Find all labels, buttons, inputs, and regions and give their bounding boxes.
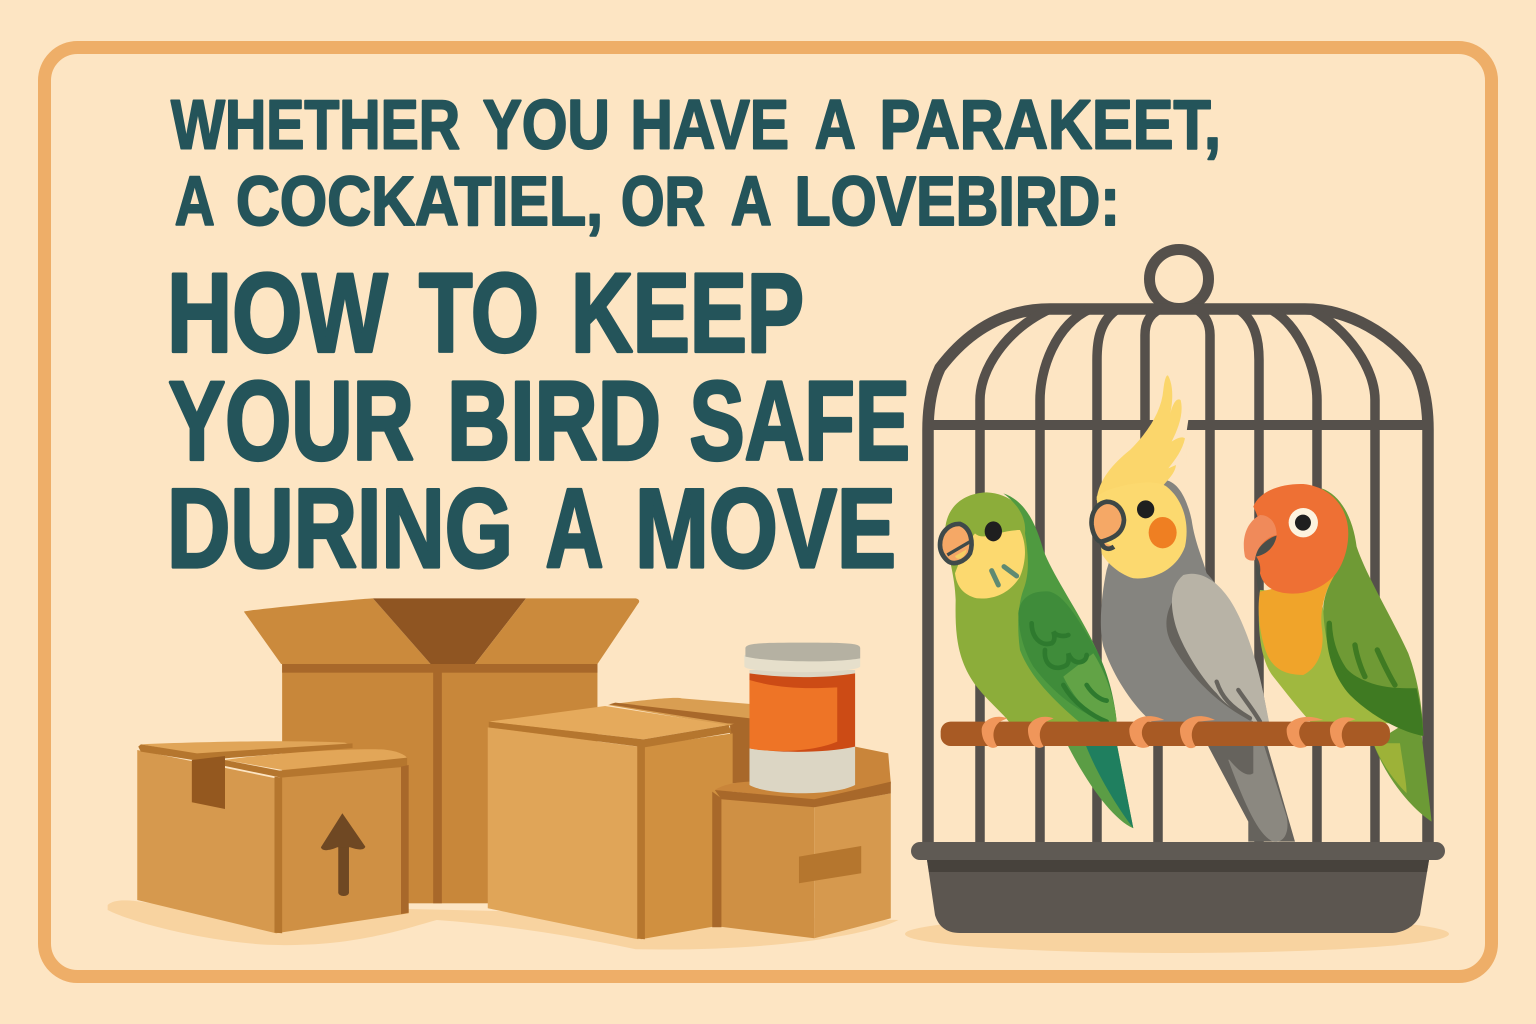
title block <box>167 86 1221 591</box>
hanging ring <box>1150 250 1208 308</box>
heading line 1 <box>167 250 804 376</box>
heading line 3 <box>167 466 896 591</box>
subtitle line 1: A <box>815 86 856 164</box>
heading line 2: YOUR <box>168 358 414 484</box>
subtitle line 2 <box>175 162 1120 240</box>
bird: lovebird <box>1244 484 1432 822</box>
medium box <box>488 706 733 939</box>
rear box <box>608 698 751 783</box>
heading line 2: SAFE <box>690 358 910 484</box>
subtitle line 1: HAVE <box>630 86 789 164</box>
bird: parakeet <box>940 492 1133 828</box>
wooden perch <box>941 722 1390 746</box>
horizontal hoop <box>928 420 1428 430</box>
bird: cockatiel <box>1092 375 1295 842</box>
icon: up arrow <box>321 813 365 896</box>
heading line 3: MOVE <box>635 466 896 591</box>
open large box <box>244 598 639 903</box>
heading line 3: DURING <box>167 466 513 591</box>
cage base tray <box>911 842 1445 933</box>
subtitle line 2: A <box>175 162 215 240</box>
heading line 1: HOW <box>167 250 388 376</box>
cage shadow <box>905 915 1449 953</box>
lower right box <box>712 747 891 938</box>
heading line 2: BIRD <box>447 358 661 484</box>
subtitle line 2: OR <box>621 162 705 240</box>
moving boxes illustration <box>108 598 898 950</box>
dome ribs and vertical bars <box>980 309 1375 850</box>
birds and perch <box>940 375 1432 842</box>
bird toes on perch <box>982 716 1356 748</box>
subtitle line 1 <box>171 86 1221 164</box>
heading line 2 <box>168 358 910 484</box>
heading line 3: A <box>546 466 604 591</box>
subtitle line 1: YOU <box>483 86 610 164</box>
heading line 1: KEEP <box>571 250 804 376</box>
food jar <box>744 643 860 793</box>
small taped box with up arrow <box>137 741 409 933</box>
subtitle line 2: COCKATIEL, <box>236 162 603 240</box>
subtitle line 1: WHETHER <box>171 86 460 164</box>
subtitle line 2: LOVEBIRD: <box>794 162 1120 240</box>
cage outline dome <box>928 309 1428 850</box>
subtitle line 1: PARAKEET, <box>880 86 1221 164</box>
boxes ground shadow <box>108 900 898 950</box>
heading line 1: TO <box>419 250 539 376</box>
bird cage wires <box>928 250 1428 850</box>
subtitle line 2: A <box>731 162 772 240</box>
